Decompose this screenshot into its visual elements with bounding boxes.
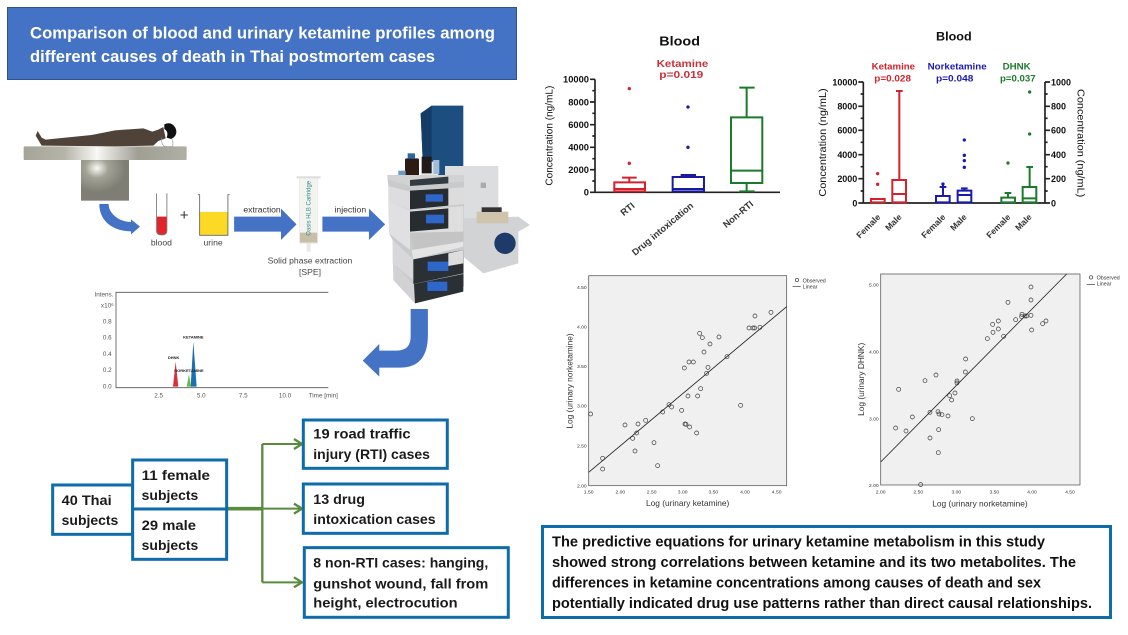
tick labels: 3.00 (577, 403, 587, 409)
tick labels: 5.00 (869, 283, 879, 289)
left axis labels: 10000 (832, 77, 857, 87)
left axis labels: 2000 (837, 174, 857, 184)
box: RTI cases: 19 road traffic (313, 427, 411, 442)
plus sign: + (180, 207, 189, 224)
box: non-RTI (731, 88, 762, 191)
icon: SPE cartridge (297, 176, 321, 252)
chromatogram labels: DHNK (168, 355, 180, 360)
legend (1087, 275, 1120, 288)
right axis labels: 800 (1051, 102, 1066, 112)
title banner (8, 8, 516, 80)
icon: SPE cartridge: Oasis HLB Cartridge (306, 180, 313, 236)
legend: Observed (803, 278, 826, 284)
chromatogram (94, 291, 338, 400)
y axis title: Log (urinary DHNK) (856, 343, 866, 416)
box: non-RTI cases: 8 non-RTI cases: hanging, (313, 556, 488, 571)
x axis labels (854, 212, 1034, 240)
right axis labels: 200 (1051, 174, 1066, 184)
left axis labels: 6000 (837, 126, 857, 136)
text: solid phase extraction: [SPE] (299, 267, 321, 277)
y axis labels: 6000 (568, 120, 589, 130)
chromatogram labels: 2.5 (154, 393, 164, 400)
arrow: table to samples (99, 204, 140, 234)
right axis labels: 600 (1051, 126, 1066, 136)
left axis labels (832, 77, 857, 208)
p values: Ketamine (872, 62, 915, 72)
box plot: metabolites by sex (818, 30, 1086, 240)
p values: Norketamine (928, 62, 987, 72)
chromatogram labels: 5.0 (197, 393, 206, 400)
arrow: extraction: extraction (243, 205, 281, 215)
scatter plot: DHNK vs norketamine (856, 274, 1120, 509)
x axis title: Log (urinary norketamine) (932, 499, 1028, 509)
tick labels: 3.50 (708, 490, 718, 496)
box: non-RTI cases: gunshot wound, fall from (313, 576, 488, 591)
data points (589, 310, 773, 471)
p values: p=0.037 (1000, 73, 1036, 83)
box: male subjects: subjects (142, 538, 199, 553)
outlier: RTI (628, 162, 631, 165)
chart title: Blood (936, 30, 972, 44)
box: non-RTI cases: height, electrocution (313, 596, 458, 611)
arrow: injection: injection (335, 205, 366, 215)
flow diagram: subjects (53, 420, 508, 617)
conclusion box: differences in ketamine concentrations among causes of death and sex (552, 574, 1042, 592)
box: drug intoxication cases (303, 484, 447, 533)
tick labels: 4.00 (1027, 490, 1037, 496)
box: RTI cases: injury (RTI) cases (313, 447, 430, 462)
arrow: instrument to chromatogram (363, 309, 428, 377)
y axis labels (563, 75, 589, 198)
scatter plot: norketamine vs ketamine (565, 276, 826, 508)
chart title: Blood (659, 35, 700, 49)
x axis labels: Male (1013, 212, 1034, 233)
tick labels: 3.00 (951, 490, 961, 496)
conclusion box: showed strong correlations between ketamine and its two metabolites. The (552, 554, 1076, 571)
ketamine peak (191, 342, 197, 387)
x axis labels (619, 199, 755, 257)
tick labels: 4.00 (577, 325, 587, 331)
icon: blood tube: blood (151, 238, 172, 248)
plot area (589, 276, 787, 486)
tick labels (577, 285, 782, 496)
plot area (881, 274, 1080, 485)
title banner: Comparison of blood and urinary ketamine profiles among (30, 24, 495, 42)
regression line (881, 274, 1067, 462)
box plot: ketamine by cause of death (545, 35, 780, 257)
x axis labels: Non-RTI (721, 199, 755, 230)
legend: Linear (1097, 282, 1112, 288)
chromatogram labels: 0.4 (103, 351, 112, 358)
box: non-RTI cases (304, 548, 508, 617)
x axis labels: Female (984, 212, 1013, 240)
left axis labels: 8000 (837, 102, 857, 112)
icon: blood tube (151, 193, 172, 248)
text: solid phase extraction (268, 255, 353, 277)
box: drug intoxication (673, 105, 704, 191)
chromatogram labels: KETAMINE (183, 334, 204, 339)
arrow: injection (322, 205, 385, 240)
tick labels: 4.00 (740, 490, 750, 496)
box: RTI (614, 87, 645, 191)
box: female subjects: 11 female (142, 468, 210, 483)
p values: DHNK (1003, 62, 1031, 72)
box: female subjects (133, 460, 227, 509)
icon: LC-MS instrument (387, 106, 530, 303)
tick labels: 4.50 (772, 490, 782, 496)
norketamine boxes (936, 138, 971, 202)
y axis labels: 10000 (563, 75, 589, 85)
tick labels: 1.50 (584, 490, 594, 496)
p value: p=0.019 (659, 70, 704, 81)
x axis labels: Drug intoxication (630, 200, 695, 257)
right axis labels: 1000 (1051, 77, 1071, 87)
tick labels: 3.00 (869, 416, 879, 422)
x axis labels: Male (948, 212, 969, 233)
y axis labels: 4000 (568, 143, 589, 153)
tick labels: 2.50 (577, 443, 587, 449)
box: drug intoxication cases: intoxication cases (313, 512, 436, 527)
chromatogram labels: 0.2 (103, 367, 112, 374)
icon: urine beaker: urine (204, 238, 223, 248)
icon: urine beaker (198, 195, 230, 248)
conclusion box (542, 526, 1110, 618)
chromatogram labels: 7.5 (239, 393, 248, 400)
norketamine peak (187, 374, 191, 387)
chromatogram labels: 0.0 (103, 383, 112, 390)
legend (793, 278, 826, 290)
legend: Observed (1097, 275, 1120, 281)
p values: p=0.048 (936, 73, 973, 83)
y axis labels: 2000 (568, 165, 589, 175)
chromatogram labels: NORKETAMINE (174, 368, 204, 373)
x axis labels: Female (919, 212, 948, 240)
tick labels: 3.50 (989, 490, 999, 496)
axes (858, 82, 1050, 203)
tick labels: 2.00 (615, 490, 625, 496)
ketamine boxes (871, 91, 906, 202)
y axis labels: 8000 (568, 97, 589, 107)
arrow: extraction (234, 205, 297, 240)
chromatogram labels (94, 291, 338, 400)
axes (590, 79, 780, 192)
conclusion box: potentially indicated drug use patterns rather than direct causal relationships. (552, 595, 1092, 612)
right axis title: Concentration (ng/mL) (1075, 89, 1086, 197)
p values (872, 62, 1036, 83)
y axis labels: 0 (584, 188, 589, 198)
chromatogram labels: Intens. (94, 291, 114, 298)
tick labels: 3.00 (678, 490, 688, 496)
tick labels: 4.00 (869, 349, 879, 355)
chromatogram labels: 0.6 (103, 335, 112, 342)
right axis labels: 400 (1051, 150, 1066, 160)
DHNK boxes (1001, 90, 1036, 202)
x axis title: Log (urinary ketamine) (646, 498, 730, 508)
box: 40 Thai subjects (53, 485, 133, 534)
data points (894, 285, 1048, 487)
x axis labels: Female (854, 212, 883, 240)
tick labels (869, 283, 1075, 496)
box: 40 Thai subjects: subjects (62, 513, 119, 528)
box: male subjects: 29 male (142, 518, 196, 533)
x axis labels: Male (883, 212, 904, 233)
p values: p=0.028 (874, 73, 911, 83)
p value: Ketamine (657, 59, 709, 70)
connector arrows (227, 439, 302, 587)
extraction and analysis workflow (99, 176, 428, 377)
icon: body on autopsy table (24, 123, 187, 201)
chromatogram labels: x10⁶ (101, 302, 114, 309)
DHNK peak (173, 362, 178, 387)
tick labels: 2.50 (913, 490, 923, 496)
box: RTI cases (303, 420, 447, 468)
left axis labels: 4000 (837, 150, 857, 160)
tick labels: 2.00 (876, 490, 886, 496)
tick labels: 4.50 (1065, 490, 1075, 496)
chromatogram labels: 10.0 (279, 393, 292, 400)
conclusion box: The predictive equations for urinary ketamine metabolism in this study (552, 534, 1046, 550)
tick labels: 4.50 (577, 285, 587, 291)
y axis title: Concentration (ng/mL) (545, 86, 556, 186)
right axis labels (1051, 77, 1071, 208)
x axis labels: RTI (619, 201, 637, 218)
tick labels: 2.00 (869, 483, 879, 489)
title banner: different causes of death in Thai postmortem cases (30, 47, 435, 66)
tick labels: 2.50 (647, 490, 657, 496)
left axis labels: 0 (852, 198, 857, 208)
text: solid phase extraction: Solid phase extraction (268, 255, 353, 265)
tick labels: 2.00 (577, 483, 587, 489)
tick labels: 3.50 (577, 364, 587, 370)
left axis title: Concentration (ng/mL) (818, 88, 829, 197)
box: male subjects (133, 509, 227, 559)
p value (657, 59, 709, 81)
chromatogram labels: Time [min] (309, 393, 338, 400)
box: 40 Thai subjects: 40 Thai (62, 493, 112, 508)
right axis labels: 0 (1051, 198, 1056, 208)
regression line (589, 307, 787, 472)
legend: Linear (803, 284, 818, 290)
y axis title: Log (urinary norketamine) (565, 333, 575, 429)
box: drug intoxication cases: 13 drug (313, 492, 365, 507)
chromatogram labels: 0.8 (103, 318, 112, 325)
box: female subjects: subjects (142, 488, 199, 503)
